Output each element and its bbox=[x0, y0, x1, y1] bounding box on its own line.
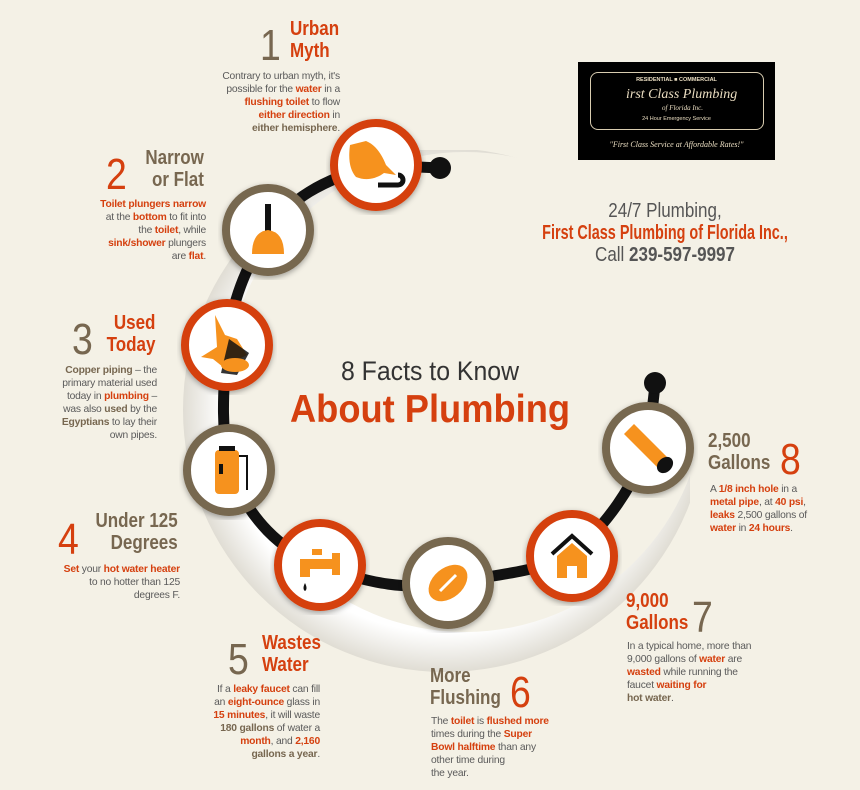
fact 3: 3 bbox=[72, 315, 93, 364]
text: hot water. bbox=[627, 693, 674, 704]
text: gallons a year. bbox=[251, 749, 320, 760]
fact 2: Toilet plungers narrow bbox=[100, 199, 206, 210]
fact 1: either direction in bbox=[259, 110, 340, 121]
circle 1: hand on handle bbox=[326, 118, 425, 215]
fact 7: wasted while running the bbox=[627, 667, 738, 678]
fact 6: The toilet is flushed more bbox=[431, 716, 549, 727]
fact 2 bbox=[100, 147, 206, 262]
fact 2: are flat. bbox=[172, 251, 206, 262]
fact 2: sink/shower plungers bbox=[108, 238, 206, 249]
fact 4: Under 125 bbox=[96, 510, 178, 532]
fact 8: 2,500 bbox=[708, 430, 751, 452]
fact 4 bbox=[58, 510, 180, 601]
fact 5: 15 minutes, it will waste bbox=[213, 710, 320, 721]
fact 5: an eight-ounce glass in bbox=[214, 697, 320, 708]
contact text bbox=[542, 200, 788, 266]
fact 7: Gallons bbox=[626, 612, 688, 634]
circle 6: football bbox=[399, 536, 498, 633]
fact 8: water in 24 hours. bbox=[710, 523, 793, 534]
fact 1: possible for the water in a bbox=[226, 84, 340, 95]
fact 5: month, and 2,160 bbox=[240, 736, 320, 747]
logo: 24 Hour Emergency Service bbox=[642, 116, 711, 122]
fact 4: Degrees bbox=[111, 532, 178, 554]
fact 4: degrees F. bbox=[134, 590, 180, 601]
title: 8 Facts to Know bbox=[341, 356, 519, 386]
fact 5: If a leaky faucet can fill bbox=[217, 684, 320, 695]
fact 5: 180 gallons of water a bbox=[220, 723, 320, 734]
fact 5: Water bbox=[262, 654, 309, 676]
circle 7: house bbox=[522, 508, 622, 606]
fact 6: other time during bbox=[431, 755, 505, 766]
fact 6: Flushing bbox=[430, 687, 501, 709]
fact 6: Bowl halftime than any bbox=[431, 742, 536, 753]
fact 3: today in plumbing – bbox=[67, 391, 157, 402]
fact 8: A 1/8 inch hole in a bbox=[710, 484, 797, 495]
fact 1: Contrary to urban myth, it's bbox=[222, 71, 340, 82]
title bbox=[290, 356, 570, 431]
fact 5: 5 bbox=[228, 635, 249, 684]
logo: RESIDENTIAL ■ COMMERCIAL bbox=[636, 77, 717, 83]
fact 7: 9,000 bbox=[626, 590, 669, 612]
fact 7 bbox=[626, 590, 751, 704]
fact 2: at the bottom to fit into bbox=[106, 212, 206, 223]
fact 1: 1 bbox=[260, 21, 281, 70]
fact 2: Narrow bbox=[145, 147, 204, 169]
fact 4: Set your hot water heater bbox=[64, 564, 180, 575]
fact 3 bbox=[62, 312, 158, 441]
contact text: First Class Plumbing of Florida Inc., bbox=[542, 222, 788, 244]
fact 1: Myth bbox=[290, 40, 330, 62]
fact 8: Gallons bbox=[708, 452, 770, 474]
fact 3: Today bbox=[106, 334, 155, 356]
fact 3: Egyptians to lay their bbox=[62, 417, 157, 428]
fact 3: primary material used bbox=[62, 378, 157, 389]
fact 8 bbox=[708, 430, 808, 534]
fact 6: times during the Super bbox=[431, 729, 532, 740]
fact 6: More bbox=[430, 665, 471, 687]
fact 1: either hemisphere. bbox=[252, 123, 340, 134]
fact 6 bbox=[430, 665, 549, 779]
fact 5: Wastes bbox=[262, 632, 321, 654]
fact 3: was also used by the bbox=[63, 404, 157, 415]
pipe bbox=[223, 165, 655, 586]
fact 3: Copper piping – the bbox=[65, 365, 157, 376]
fact 5 bbox=[213, 632, 321, 760]
fact 1: flushing toilet to flow bbox=[244, 97, 340, 108]
circle 3: anubis bbox=[178, 298, 276, 395]
fact 7: 9,000 gallons of water are bbox=[627, 654, 742, 665]
circle 2: plunger bbox=[218, 182, 318, 280]
fact 8: 8 bbox=[780, 435, 801, 484]
fact 3: Used bbox=[113, 312, 155, 334]
logo bbox=[578, 62, 775, 160]
fact 6: the year. bbox=[431, 768, 469, 779]
fact 2: 2 bbox=[106, 150, 127, 199]
contact text: Call 239-597-9997 bbox=[595, 244, 735, 266]
fact 7: In a typical home, more than bbox=[627, 641, 751, 652]
fact 4: 4 bbox=[58, 515, 79, 564]
fact 4: to no hotter than 125 bbox=[89, 577, 180, 588]
fact 6: 6 bbox=[510, 668, 531, 717]
fact 8: leaks 2,500 gallons of bbox=[710, 510, 807, 521]
fact 1: Urban bbox=[290, 18, 339, 40]
fact 1 bbox=[222, 18, 340, 134]
fact 2: or Flat bbox=[152, 169, 204, 191]
circle 8: pipe bbox=[598, 400, 698, 498]
title: About Plumbing bbox=[290, 388, 570, 431]
fact 2: the toilet, while bbox=[138, 225, 206, 236]
contact text: 24/7 Plumbing, bbox=[608, 200, 722, 222]
fact 8: metal pipe, at 40 psi, bbox=[710, 497, 806, 508]
logo: irst Class Plumbing bbox=[626, 87, 737, 102]
logo: "First Class Service at Affordable Rates!" bbox=[609, 140, 744, 149]
fact 7: 7 bbox=[692, 593, 713, 642]
circle 4: water heater bbox=[180, 422, 278, 520]
logo: of Florida Inc. bbox=[662, 104, 703, 112]
fact 7: faucet waiting for bbox=[627, 680, 706, 691]
text: own pipes. bbox=[110, 430, 157, 441]
circle 5: faucet bbox=[270, 518, 370, 615]
